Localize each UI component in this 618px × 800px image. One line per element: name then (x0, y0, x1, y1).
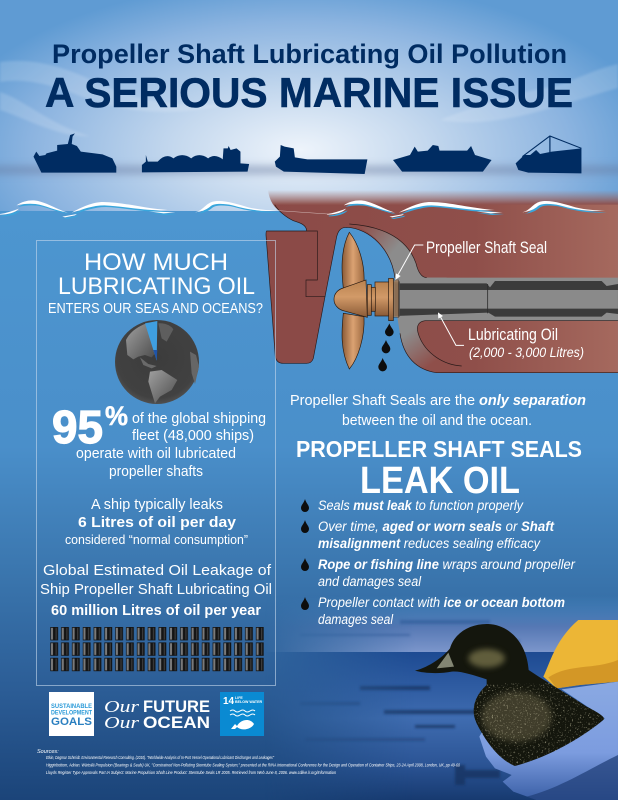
hull outlines (275, 205, 618, 373)
propeller hub (334, 280, 367, 317)
icon: globe (115, 320, 199, 404)
oil channel (427, 278, 618, 321)
logo row (49, 692, 264, 736)
text block: seals are the only separation: Propeller Shaft Seals are the only separation (290, 392, 586, 409)
wave crests white left (0, 200, 278, 217)
oil cavity lower (397, 313, 618, 373)
background: sky wisps (0, 61, 618, 136)
diagram labels (426, 239, 584, 360)
photo: oiled sea bird on the shore (282, 604, 618, 800)
logo: our future our ocean (104, 697, 210, 732)
stat: global leakage (40, 562, 272, 619)
wave crests cyan right (329, 202, 607, 219)
background: sky (0, 0, 618, 215)
stat: 95 percent: % (105, 401, 128, 431)
bullet: seals must leak: Seals must leak to function properly (318, 498, 524, 513)
south america (148, 370, 177, 403)
stat: 95 percent (52, 401, 266, 480)
source b: Higginbottom, Adrian. Wärtsilä Propulsion (Bearings & Seals) UK, "Constrained Non-Polluting Sterntube Sealing System," presented at the RINA International Conference for the Design and Operation of Container Ships, 23-24 April 2008, London, UK, pp 49-60 (46, 762, 460, 768)
photo sky (282, 604, 618, 652)
bullet icons (301, 499, 309, 610)
bullet: ice or ocean bottom: damages seal (318, 612, 394, 627)
bullet list (301, 498, 575, 627)
stat: global leakage: Global Estimated Oil Leakage of (43, 562, 272, 579)
heading: propeller shaft seals leak oil: LEAK OIL (360, 460, 520, 502)
stat: global leakage: Ship Propeller Shaft Lubricating Oil (40, 581, 272, 598)
label: litres: (2,000 - 3,000 Litres) (469, 345, 584, 360)
photo sea (278, 652, 608, 800)
logo: our future our ocean: FUTURE (143, 697, 210, 716)
logo: sdg 14 life below water (220, 692, 264, 736)
bird body (415, 624, 604, 766)
panel heading: HOW MUCH (84, 249, 228, 276)
oil drops (378, 323, 394, 371)
logo: sdg 14 life below water: BELOW WATER (235, 700, 262, 704)
logo: sustainable development goals: SUSTAINABLE (51, 703, 92, 710)
photo scenery (282, 604, 618, 800)
body gloss (482, 692, 552, 742)
waves (0, 200, 607, 219)
logo: our future our ocean: OCEAN (143, 713, 210, 732)
source a: Etkin, Dagmar Schmidt. Environmental Research Consulting. (2010). "Worldwide Analysis of In-Port Vessel Operational Lubricant Discharges and Leakages" (46, 755, 274, 761)
logo: sustainable development goals: GOALS (51, 716, 92, 728)
text block: seals are the only separation: between the oil and the ocean. (342, 412, 532, 429)
bullet: ice or ocean bottom (318, 595, 565, 627)
hub collar (367, 285, 371, 315)
logo: sustainable development goals: DEVELOPMENT (51, 710, 92, 716)
sources heading: Sources: (37, 749, 59, 755)
panel outline (36, 240, 276, 686)
arrow: to seal (395, 245, 423, 280)
background: underwater gradient (0, 211, 618, 800)
logo: our future our ocean: Our (104, 697, 139, 716)
background: horizon band (0, 166, 618, 174)
ship: LNG carrier (142, 146, 249, 172)
label: propeller shaft seal: Propeller Shaft Seal (426, 239, 547, 257)
ship: cargo vessel with rigging (516, 136, 581, 173)
greenland (158, 323, 173, 342)
feather speckle (470, 683, 607, 767)
ship hull cross-section (266, 190, 618, 373)
stat: six litres per day (65, 497, 248, 547)
propeller (334, 232, 399, 369)
shaft seal (389, 278, 393, 321)
stat: 95 percent: propeller shafts (109, 464, 203, 480)
panel: how much lubricating oil (36, 240, 276, 686)
yellow sleeve (543, 620, 618, 688)
wave crests white right (327, 200, 605, 217)
sources (37, 749, 460, 776)
africa (190, 352, 199, 384)
logo: our future our ocean: Our (104, 713, 139, 732)
ship: ferry (34, 133, 116, 173)
title (45, 39, 573, 116)
shaft join line (486, 284, 489, 313)
shaft centre (398, 290, 618, 309)
glove (479, 682, 618, 800)
oil wedge (145, 321, 157, 361)
logo: sustainable development goals (49, 692, 94, 736)
globe land (126, 321, 199, 403)
glove shadow (527, 755, 618, 800)
ship: cruise liner (393, 145, 492, 172)
heading: propeller shaft seals leak oil (296, 436, 582, 502)
stat: six litres per day: 6 Litres of oil per day (78, 514, 237, 531)
panel heading (48, 249, 263, 317)
north america (126, 323, 155, 359)
rudder (266, 231, 325, 363)
shaft joint (393, 281, 400, 317)
wave streaks (300, 686, 500, 785)
propeller shaft (393, 281, 618, 317)
title line two: A SERIOUS MARINE ISSUE (45, 69, 573, 116)
bird plumage highlights (468, 649, 505, 668)
logo: sdg 14 life below water: LIFE (235, 696, 243, 700)
stat: 95 percent: of the global shipping (132, 411, 266, 427)
hub sleeve (375, 282, 389, 316)
sleeve shading (548, 660, 618, 688)
bullet: aged seals (318, 519, 554, 551)
text block: seals are the only separation (290, 392, 586, 429)
bullet: rope or fishing line: and damages seal (318, 574, 422, 589)
hull body (275, 205, 618, 373)
arrow: to oil (438, 312, 464, 345)
panel heading: LUBRICATING OIL (58, 273, 255, 300)
bullet: aged seals: Over time, aged or worn seals or Shaft (318, 519, 554, 534)
propeller lower blade (342, 313, 364, 369)
hull above water fade (268, 190, 618, 213)
ship: tanker (275, 145, 367, 174)
wave crests cyan left (2, 202, 279, 219)
logo: sdg 14 life below water: 14 (223, 696, 235, 707)
photo clouds (336, 620, 520, 643)
label: lubricating oil: Lubricating Oil (468, 326, 558, 344)
oil cavity upper (349, 224, 447, 300)
bird and hands (415, 620, 618, 800)
panel heading: ENTERS OUR SEAS AND OCEANS? (48, 301, 263, 317)
stat: global leakage: 60 million Litres of oil per year (51, 602, 261, 619)
propeller upper blade (342, 232, 364, 288)
wave link at shore (278, 211, 328, 214)
bullet: rope or fishing line (318, 557, 575, 589)
ship silhouettes (34, 133, 581, 174)
barrel pictogram (50, 627, 266, 672)
title line one: Propeller Shaft Lubricating Oil Pollution (52, 39, 567, 69)
central america (140, 357, 157, 368)
source c: Lloyds Register Type Approvals Part IA Subject: Marine Propulsion Shaft Line Product: Sterntube Seals LR 2005. Retrieved from Web June 8, 2006. www.cdlive.lr.org/Information (46, 770, 336, 776)
stat: 95 percent: operate with oil lubricated (76, 446, 236, 462)
bullet: rope or fishing line: Rope or fishing line wraps around propeller (318, 557, 575, 572)
stat: six litres per day: considered “normal consumption” (65, 532, 248, 547)
heading: propeller shaft seals leak oil: PROPELLER SHAFT SEALS (296, 436, 582, 462)
stat: six litres per day: A ship typically leaks (91, 497, 223, 513)
shaft tube (395, 281, 618, 317)
beak gloss (437, 653, 454, 668)
wedge lower (153, 350, 157, 361)
bullet: ice or ocean bottom: Propeller contact with ice or ocean bottom (318, 595, 565, 610)
stat: 95 percent: 95 (52, 401, 103, 453)
stat: 95 percent: fleet (48,000 ships) (132, 428, 254, 444)
bullet: aged seals: misalignment reduces sealing efficacy (318, 536, 541, 551)
